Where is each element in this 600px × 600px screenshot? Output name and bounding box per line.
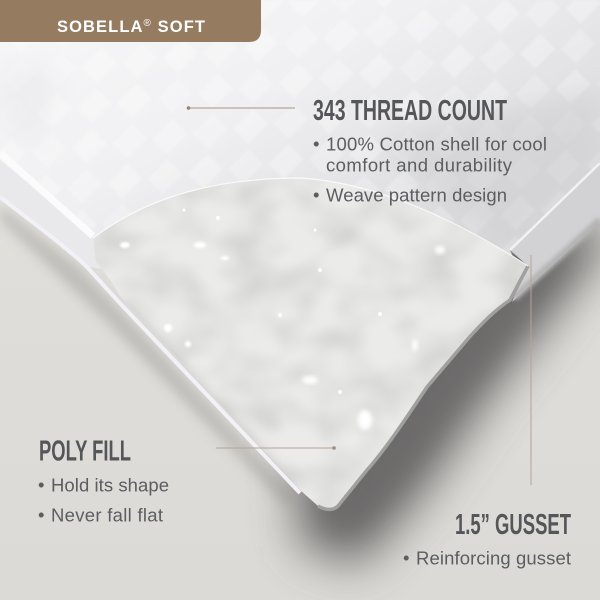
fill edge shading — [124, 300, 296, 485]
panel: pillow shell with weave — [0, 0, 600, 257]
text block: poly fill: POLY FILL — [39, 436, 131, 468]
text block: gusset — [403, 509, 571, 568]
text block: poly fill: Never fall flat — [51, 504, 163, 526]
text block: 343 thread count: • — [313, 133, 319, 154]
badge: Sobella Soft: SOFT — [152, 18, 205, 36]
badge: Sobella Soft: ® — [144, 18, 152, 29]
panel: gusset and piping — [0, 153, 600, 493]
text block: poly fill: • — [38, 504, 44, 525]
text block: 343 thread count: 100% Cotton shell for cool — [326, 134, 547, 154]
panel: poly fill cutaway — [80, 170, 540, 520]
fill highlights — [120, 208, 445, 430]
pillow drop shadow — [0, 205, 600, 565]
text block: poly fill — [38, 436, 169, 526]
text block: 343 thread count: comfort and durability — [326, 154, 513, 176]
callout line: poly fill — [216, 446, 336, 450]
callout line: gusset — [530, 255, 532, 485]
fill lumpy texture — [94, 180, 526, 508]
text block: gusset: • — [403, 547, 409, 568]
callout line: thread count — [187, 106, 295, 110]
badge: Sobella Soft — [0, 0, 261, 42]
text block: 343 thread count — [313, 95, 547, 206]
text block: 343 thread count: • — [313, 184, 319, 205]
text block: gusset: Reinforcing gusset — [416, 548, 571, 568]
text block: 343 thread count: 343 THREAD COUNT — [313, 95, 507, 127]
text block: poly fill: • — [38, 474, 44, 495]
text block: poly fill: Hold its shape — [51, 474, 169, 496]
badge: Sobella Soft: SOBELLA — [57, 18, 142, 36]
text block: 343 thread count: Weave pattern design — [326, 184, 507, 206]
